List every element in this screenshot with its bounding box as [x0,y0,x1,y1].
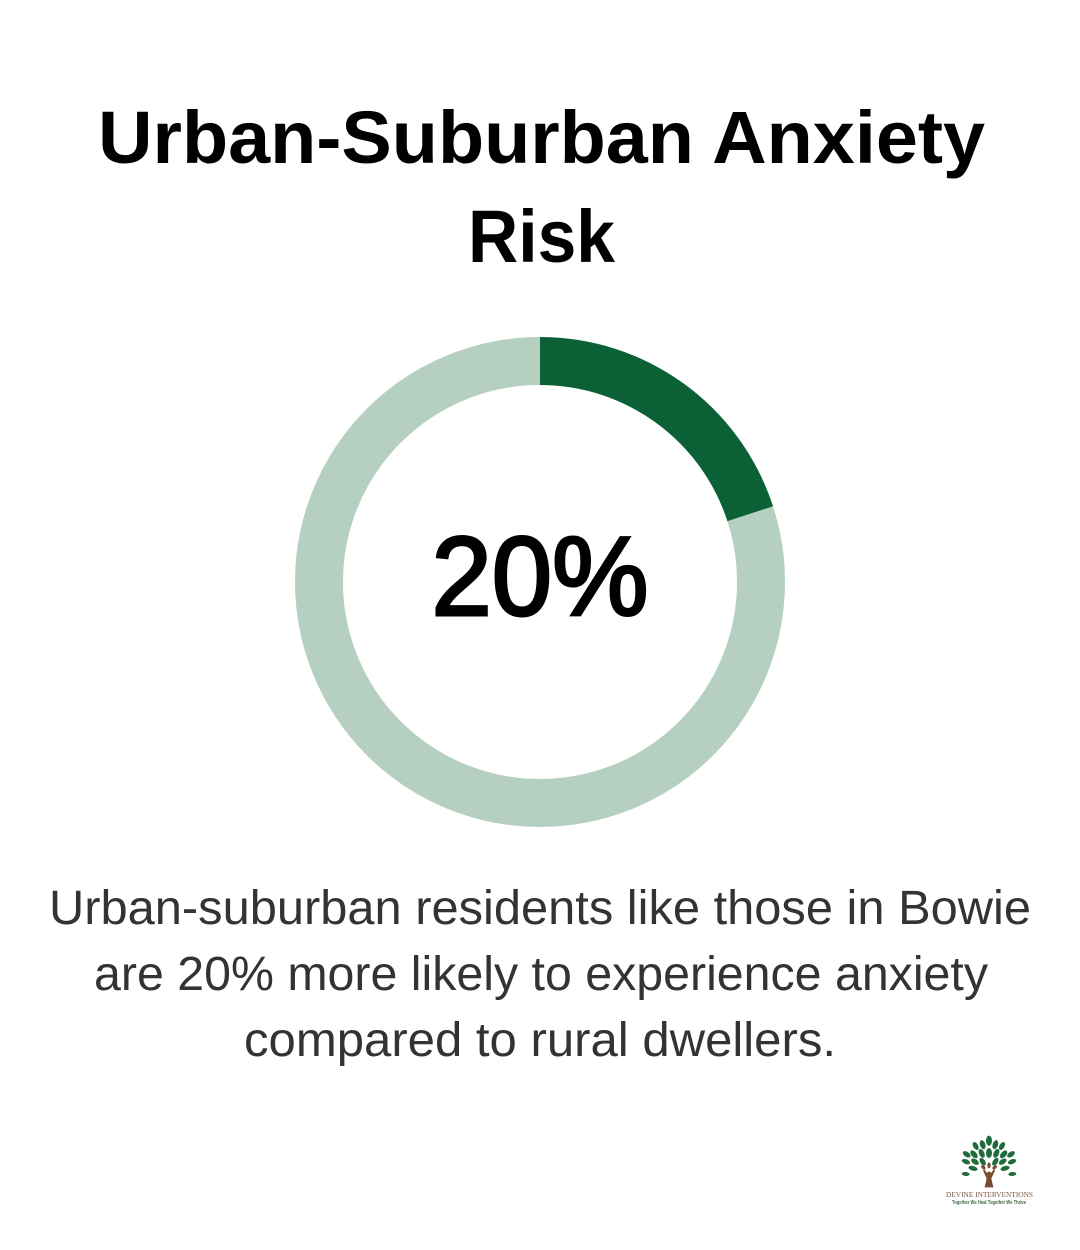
icon: tree [961,1136,1017,1187]
donut highlighted segment [540,337,773,521]
donut value: 20% [432,514,648,639]
logo: Devine Interventions [946,1136,1033,1206]
description text: Urban-suburban residents like those in Bowie [49,882,1031,935]
donut chart: 20% [319,337,773,803]
title [98,96,985,278]
description text [49,882,1031,1067]
title: Risk [468,195,616,278]
description text: are 20% more likely to experience anxiety [94,948,988,1001]
description text: compared to rural dwellers. [244,1014,836,1067]
title: Urban-Suburban Anxiety [98,96,985,179]
logo tagline: Together We Heal Together We Thrive [952,1200,1026,1206]
logo name: DEVINE INTERVENTIONS [946,1190,1033,1199]
donut track [319,361,761,803]
